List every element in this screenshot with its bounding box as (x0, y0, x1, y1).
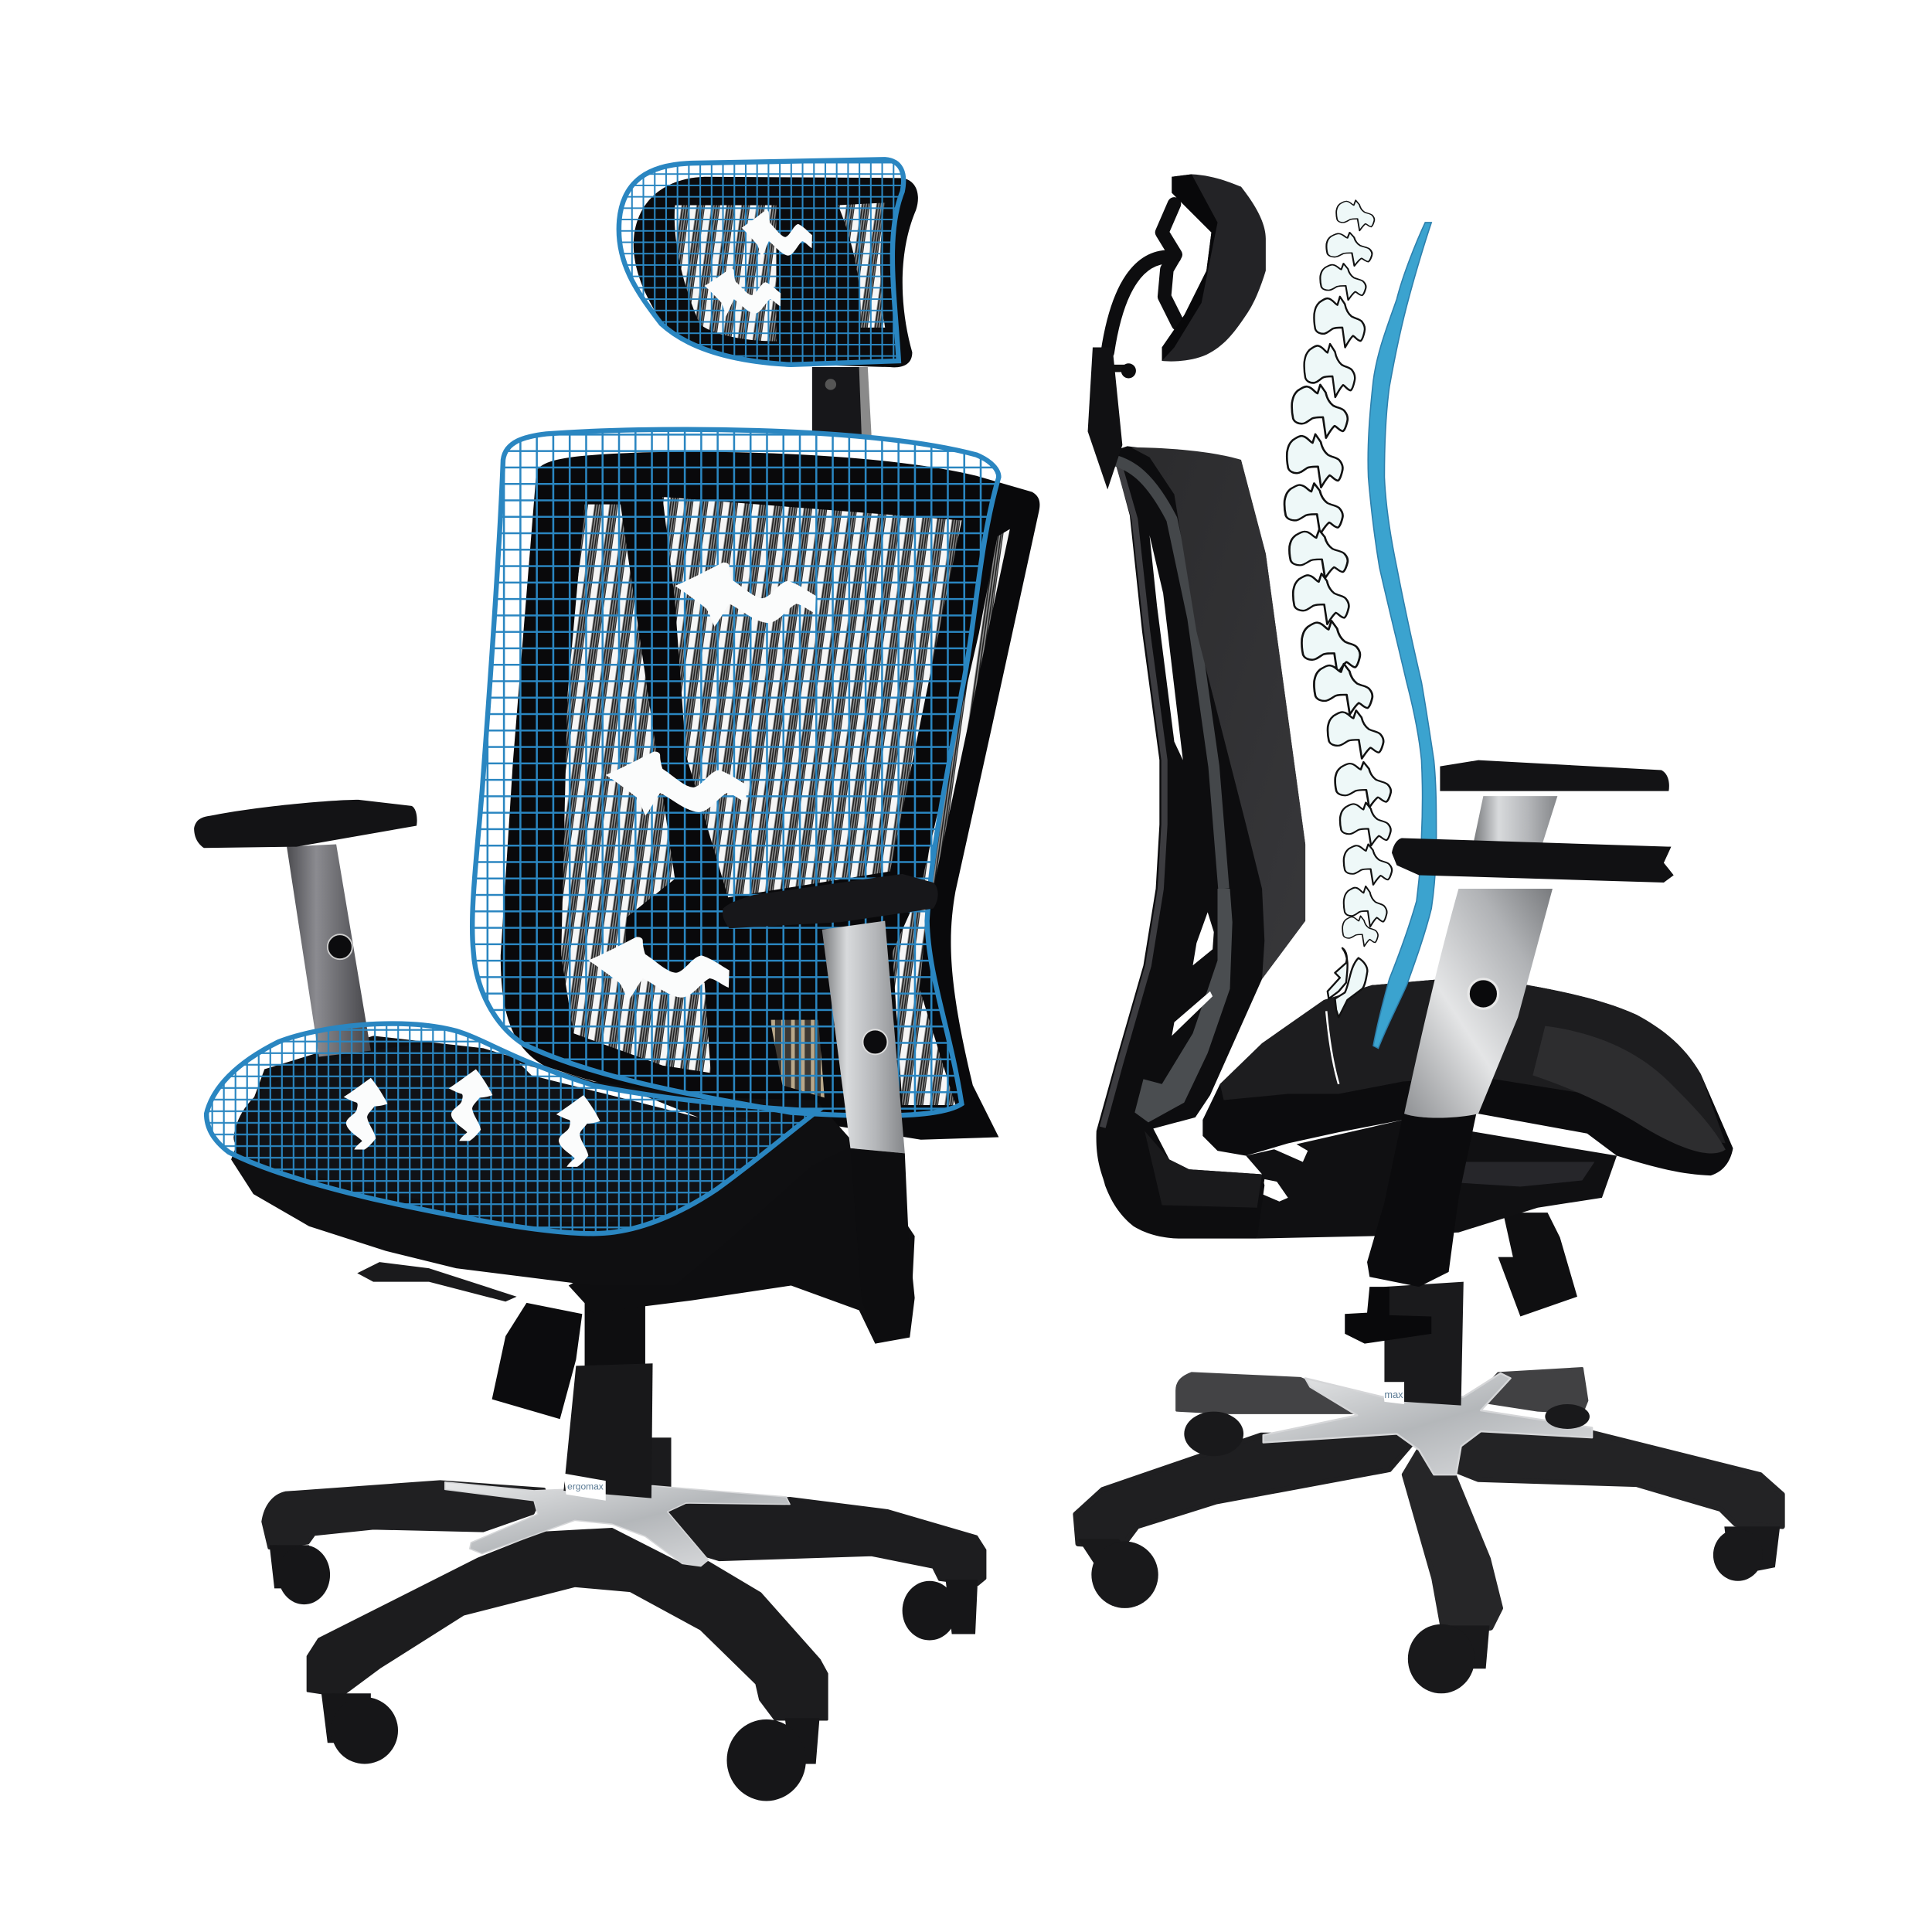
brand label (1382, 1382, 1404, 1404)
grid: seat (209, 1026, 806, 1232)
clamp knob (1113, 363, 1136, 378)
gas column (563, 1298, 653, 1501)
far arm pad (1440, 760, 1669, 791)
inner frame highlight (1113, 460, 1223, 889)
headrest body (634, 177, 918, 367)
spine illustration (1284, 200, 1392, 1017)
left armrest (194, 800, 417, 1057)
base leg: rear right (1474, 1369, 1587, 1413)
airflow arrows: headrest (705, 210, 812, 316)
outline: seat (206, 1024, 817, 1233)
silver hub (445, 1482, 790, 1566)
brand label (563, 1474, 606, 1501)
base leg: rear left (1177, 1373, 1359, 1413)
white gap between back and seat (519, 1063, 699, 1117)
base leg: front left (1076, 1435, 1419, 1546)
under-seat mechanism (1246, 1120, 1617, 1239)
base leg: right (1454, 1433, 1782, 1526)
grid: back (464, 420, 1008, 1125)
sacrum: right lobe (1335, 958, 1367, 1017)
grid: headrest (621, 162, 901, 362)
headrest pad (1162, 175, 1266, 362)
blue lumbar curve (1368, 223, 1437, 1048)
near arm pad (1392, 838, 1674, 883)
headrest bracket (1107, 204, 1178, 352)
airflow arrows: back (588, 563, 816, 1002)
headrest clamp (1088, 347, 1122, 489)
arm post (287, 844, 371, 1057)
near arm post (822, 921, 905, 1153)
seat top surface (233, 1045, 791, 1223)
inner frame lower loop (1134, 889, 1233, 1122)
brand label: ergomax (567, 1481, 604, 1492)
left chair casters (270, 1545, 978, 1801)
tilt knob (1498, 1213, 1577, 1316)
arm knob (328, 934, 352, 959)
arm post hole (1468, 979, 1498, 1009)
under-seat mechanism (569, 1144, 915, 1344)
seat body (1202, 978, 1733, 1175)
base leg: rear left (264, 1482, 544, 1548)
tilt knob (492, 1303, 582, 1419)
airflow arrows: seat (344, 1070, 600, 1167)
seat underside (231, 1036, 855, 1285)
white slot in back frame (1150, 536, 1183, 760)
back frame (501, 452, 1039, 1140)
near arm knob (862, 1029, 887, 1054)
gas column (1382, 1282, 1464, 1406)
brand label: max (1384, 1389, 1403, 1400)
base legs: front pair (308, 1529, 827, 1719)
far arm post (1474, 796, 1557, 843)
headrest mesh panels (675, 202, 885, 341)
silver hub (1264, 1373, 1592, 1475)
right chair casters (1078, 1404, 1780, 1693)
back mesh: right strip (893, 529, 1010, 1105)
near armrest (723, 874, 938, 1344)
right chair (1076, 175, 1782, 1693)
back mesh: left band (561, 505, 711, 1073)
seat upper surface (1220, 978, 1726, 1144)
base leg: right (668, 1498, 985, 1585)
right chair star base (1076, 1369, 1782, 1633)
base leg: front (1404, 1450, 1501, 1633)
back frame and base sweep (1097, 446, 1305, 1239)
seat (1202, 978, 1733, 1175)
sacrum sliver on seat (1326, 1011, 1338, 1084)
column sleeve (1367, 1104, 1478, 1287)
white gaps in frame (1172, 912, 1214, 1036)
arm pad (194, 800, 417, 848)
headrest: side view (1088, 175, 1266, 489)
seat mesh highlight (1532, 1026, 1726, 1153)
sacrum: left lobe (1328, 948, 1348, 998)
outline: headrest (619, 159, 903, 365)
back mesh: lower tan patch (770, 1020, 825, 1097)
lower plate (1145, 1131, 1262, 1208)
back mesh pad (1131, 447, 1305, 979)
height lever (1345, 1287, 1431, 1344)
outer frame edge highlight (1103, 464, 1165, 1128)
mechanism white gaps (1262, 1142, 1308, 1202)
back mesh: main panel (662, 497, 961, 897)
blue grid overlays (198, 148, 1008, 1242)
near arm pad (723, 874, 938, 928)
headrest post (812, 367, 872, 435)
left chair star base (264, 1437, 985, 1719)
left chair (194, 148, 1039, 1801)
tilt lever (357, 1262, 517, 1301)
outline: back (472, 430, 998, 1116)
near arm post (1404, 889, 1553, 1118)
